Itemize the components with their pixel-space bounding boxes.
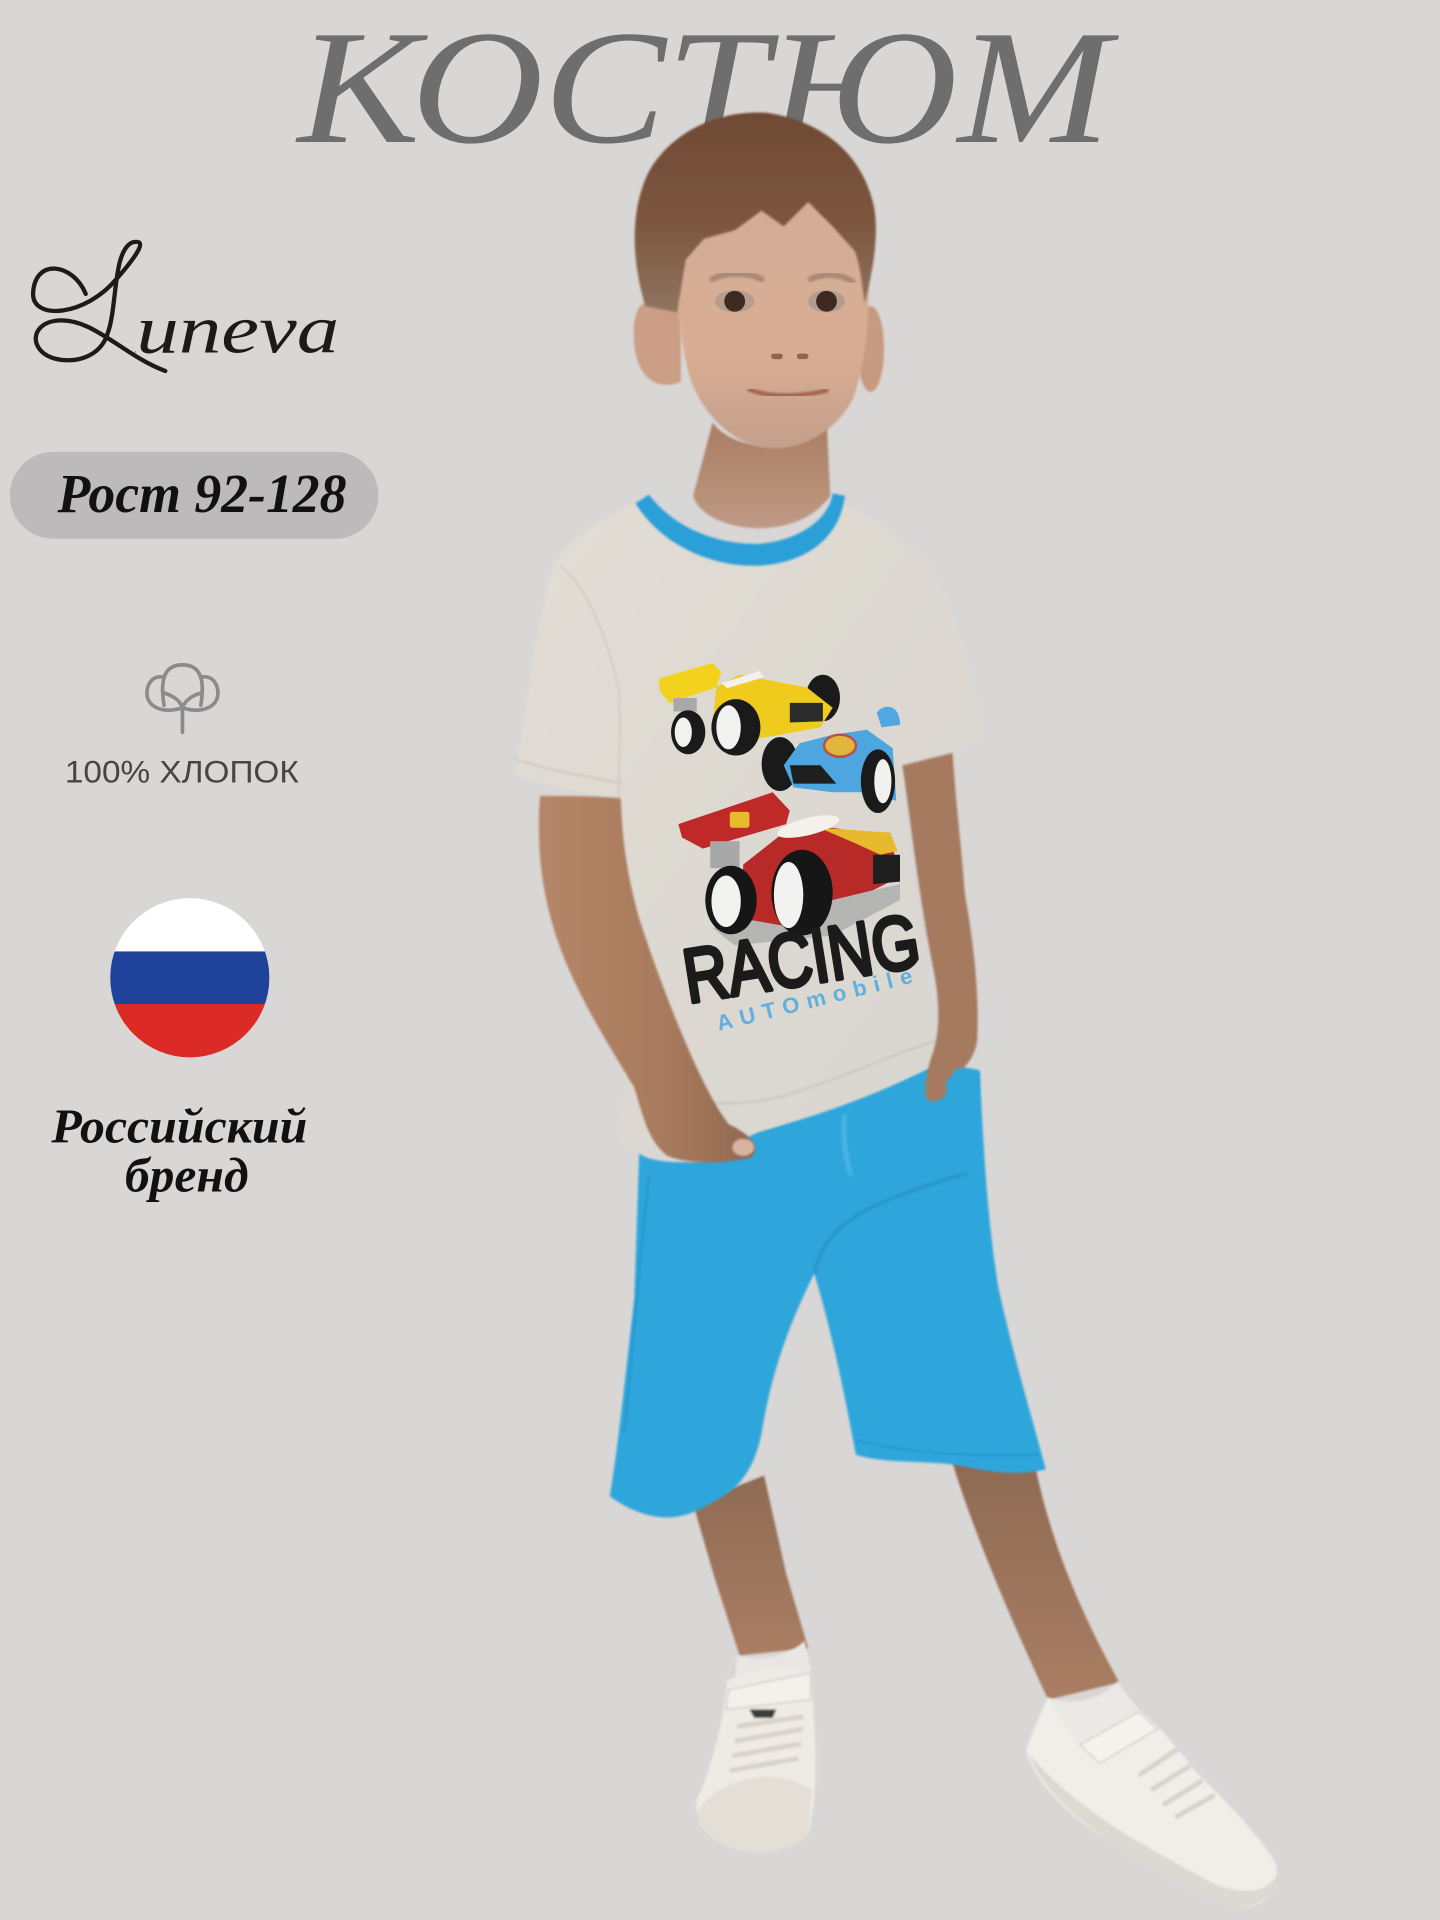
logo: Luneva: Luneva [133,292,339,368]
shorts [610,1063,1046,1517]
collar [636,493,845,566]
brand text: бренд [125,1147,249,1202]
neck [693,416,830,528]
shoe: right [1026,1697,1277,1908]
right arm and hand [902,753,978,1101]
eyes [715,290,845,312]
pocket right [945,1068,980,1108]
face [675,196,869,448]
legs [693,1463,1119,1700]
icon: cotton boll [147,665,218,732]
t-shirt [516,502,986,1151]
eyebrows [713,274,852,282]
hair [635,112,876,312]
ear right [857,306,884,392]
icon: Russian flag [110,898,269,1058]
height badge [10,452,378,539]
cotton label [65,665,299,789]
red car [678,792,900,945]
cotton text: 100% ХЛОПОК [65,753,299,789]
nose [774,354,806,359]
ear left [634,304,681,385]
blue car [762,707,900,813]
print text: RACING: RACING [678,899,925,1020]
brand text: Российский [50,1098,307,1153]
fingernail left [732,1139,754,1156]
print text: Automobile: AUTOmobile [714,963,915,1036]
title: КОСТЮМ [295,0,1120,178]
left arm and hand [539,796,755,1163]
t-shirt print [659,663,925,1036]
logo: Luneva [33,242,339,371]
boy figure [516,112,1277,1908]
socks [735,1641,1146,1753]
height badge: Рост 92-128 [57,463,347,524]
shoe: left [697,1669,815,1852]
yellow car [659,663,840,756]
brand text [50,1098,307,1202]
mouth [749,389,827,396]
